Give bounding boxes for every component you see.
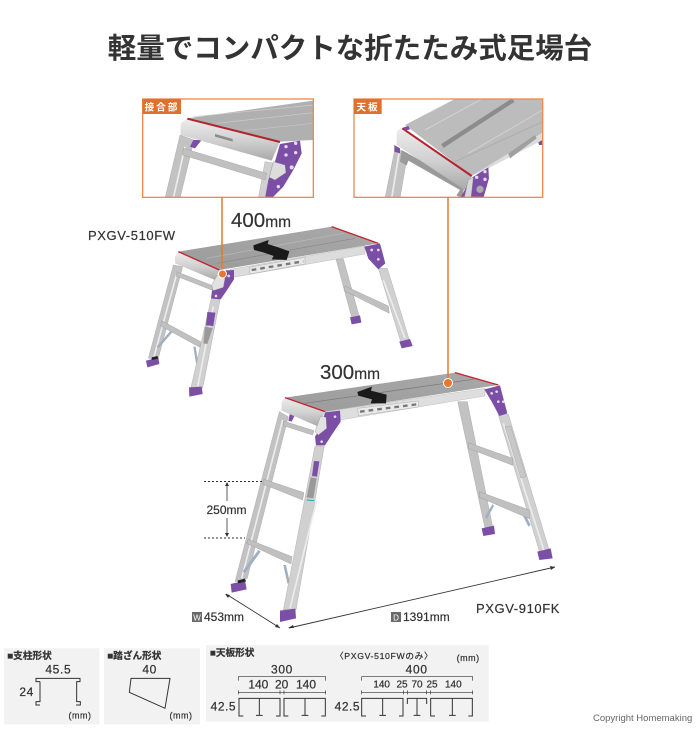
- 400 deck dimensions: 42.5: [335, 700, 360, 714]
- photo: red edge: [187, 119, 280, 142]
- arrow: deck width: [357, 387, 387, 403]
- 300 deck dimensions: 140: [296, 677, 316, 691]
- callout line and dot: joint: [218, 197, 226, 278]
- label: 400mm: 400mm: [231, 209, 291, 232]
- photo: centre groove: [442, 100, 513, 146]
- 400 deck dimensions: 140: [445, 680, 462, 691]
- 300 deck dimensions: [211, 662, 326, 716]
- unit: (mm): [170, 710, 192, 720]
- back left leg: [235, 412, 288, 582]
- end beam: [282, 398, 325, 427]
- trapezoid shape: [129, 678, 170, 708]
- callout line and dot: deck: [444, 197, 452, 388]
- far back leg: [336, 259, 359, 317]
- dimension: width 453mm: W: [193, 614, 201, 622]
- photo: rung: [183, 148, 267, 180]
- photo: dark rung: [400, 150, 465, 198]
- 400 deck dimensions: 25: [426, 680, 438, 691]
- side beam: [230, 246, 365, 277]
- tag: 接合部: 接合部: [145, 101, 179, 113]
- unit: (mm): [457, 653, 480, 663]
- purple brackets: [315, 411, 341, 445]
- panel border: [354, 99, 543, 197]
- deck: [178, 227, 378, 270]
- photo: end beam: [397, 128, 472, 190]
- dimension: 45.5: [45, 662, 71, 676]
- dimension: 40: [142, 662, 157, 676]
- 300 deck dimensions: 42.5: [211, 700, 236, 714]
- far back leg: [458, 402, 493, 528]
- heading: ■天板形状: [210, 647, 255, 659]
- unit: (mm): [69, 710, 91, 720]
- photo: red edge: [402, 128, 472, 176]
- photo: side beam: [472, 133, 543, 176]
- end beam: [175, 252, 219, 280]
- back left leg: [148, 265, 183, 358]
- dimension: 24: [19, 685, 34, 699]
- 300 deck dimensions: 300: [271, 662, 293, 676]
- 400 deck dimensions: [335, 662, 473, 716]
- photo: purple bracket: [265, 141, 302, 198]
- safety sticker: [358, 401, 418, 416]
- dimension: depth 1391mm: 1391mm: [403, 610, 450, 624]
- far front leg: [378, 268, 409, 342]
- dimension: depth 1391mm: [288, 566, 555, 628]
- dimension: rung spacing 250mm: [204, 482, 262, 538]
- tag: 天板: [354, 99, 382, 114]
- photo: left leg: [165, 135, 194, 198]
- photo: name plate: [215, 134, 233, 142]
- panel: post cross-section: [4, 648, 99, 724]
- heading: ■支柱形状: [7, 650, 52, 662]
- deck: [285, 373, 498, 412]
- photo: deck surface: [405, 99, 543, 176]
- panel: joint close-up: [143, 99, 313, 198]
- feet: [146, 358, 159, 367]
- far front leg: [498, 414, 549, 553]
- 400 deck dimensions: 70: [411, 680, 423, 691]
- tag: 接合部: [143, 99, 181, 114]
- photo: left leg: [385, 148, 408, 198]
- title: 軽量でコンパクトな折たたみ式足場台: [108, 33, 592, 65]
- panel: deck close-up: [354, 99, 543, 198]
- panel border: [143, 99, 313, 197]
- photo: right leg: [258, 162, 273, 197]
- panel: rung cross-section: [104, 648, 200, 724]
- 400 deck dimensions: 25: [396, 680, 408, 691]
- note: 〈PXGV-510FWのみ〉: [335, 651, 433, 661]
- photo: hinge: [269, 162, 286, 180]
- feet: [231, 581, 247, 593]
- channel shape: [36, 678, 80, 705]
- photo: far purple foot: [538, 140, 542, 145]
- near front leg: [191, 299, 220, 388]
- large ladder PXGV-910FK: [231, 373, 553, 622]
- label: PXGV-510FW: PXGV-510FW: [88, 228, 176, 243]
- small ladder PXGV-510FW: [146, 227, 413, 397]
- dimension: rung spacing 250mm: 250mm: [206, 503, 247, 517]
- rungs: [176, 272, 213, 290]
- dimension: width 453mm: [192, 594, 280, 628]
- 300 deck dimensions: 140: [248, 677, 269, 691]
- near front leg: [283, 446, 324, 610]
- 300 deck dimensions: 20: [275, 677, 289, 691]
- tag: 天板: 天板: [356, 101, 380, 113]
- label: 300mm: 300mm: [320, 361, 380, 384]
- heading: ■踏ざん形状: [107, 650, 162, 662]
- panel: deck cross-section: [206, 645, 489, 722]
- photo: end beam: [181, 118, 280, 161]
- photo: hinge: [464, 177, 473, 197]
- 400 deck dimensions: 400: [406, 662, 428, 676]
- label: PXGV-910FK: PXGV-910FK: [476, 601, 560, 616]
- red edges: [178, 252, 219, 270]
- copyright: Copyright Homemaking: [593, 713, 692, 724]
- dimension: width 453mm: 453mm: [204, 610, 244, 624]
- red edges: [285, 398, 325, 412]
- dimension: depth 1391mm: D: [393, 614, 399, 622]
- side beam: [325, 388, 485, 420]
- photo: deck surface: [187, 101, 313, 142]
- hinge: [315, 416, 327, 435]
- photo: purple bracket: [460, 167, 489, 198]
- 400 deck dimensions: 140: [373, 680, 390, 691]
- arrow: deck width: [253, 240, 289, 260]
- safety sticker: [249, 257, 305, 274]
- purple brackets: [211, 270, 234, 299]
- rungs: [283, 421, 314, 435]
- hinge: [212, 275, 225, 291]
